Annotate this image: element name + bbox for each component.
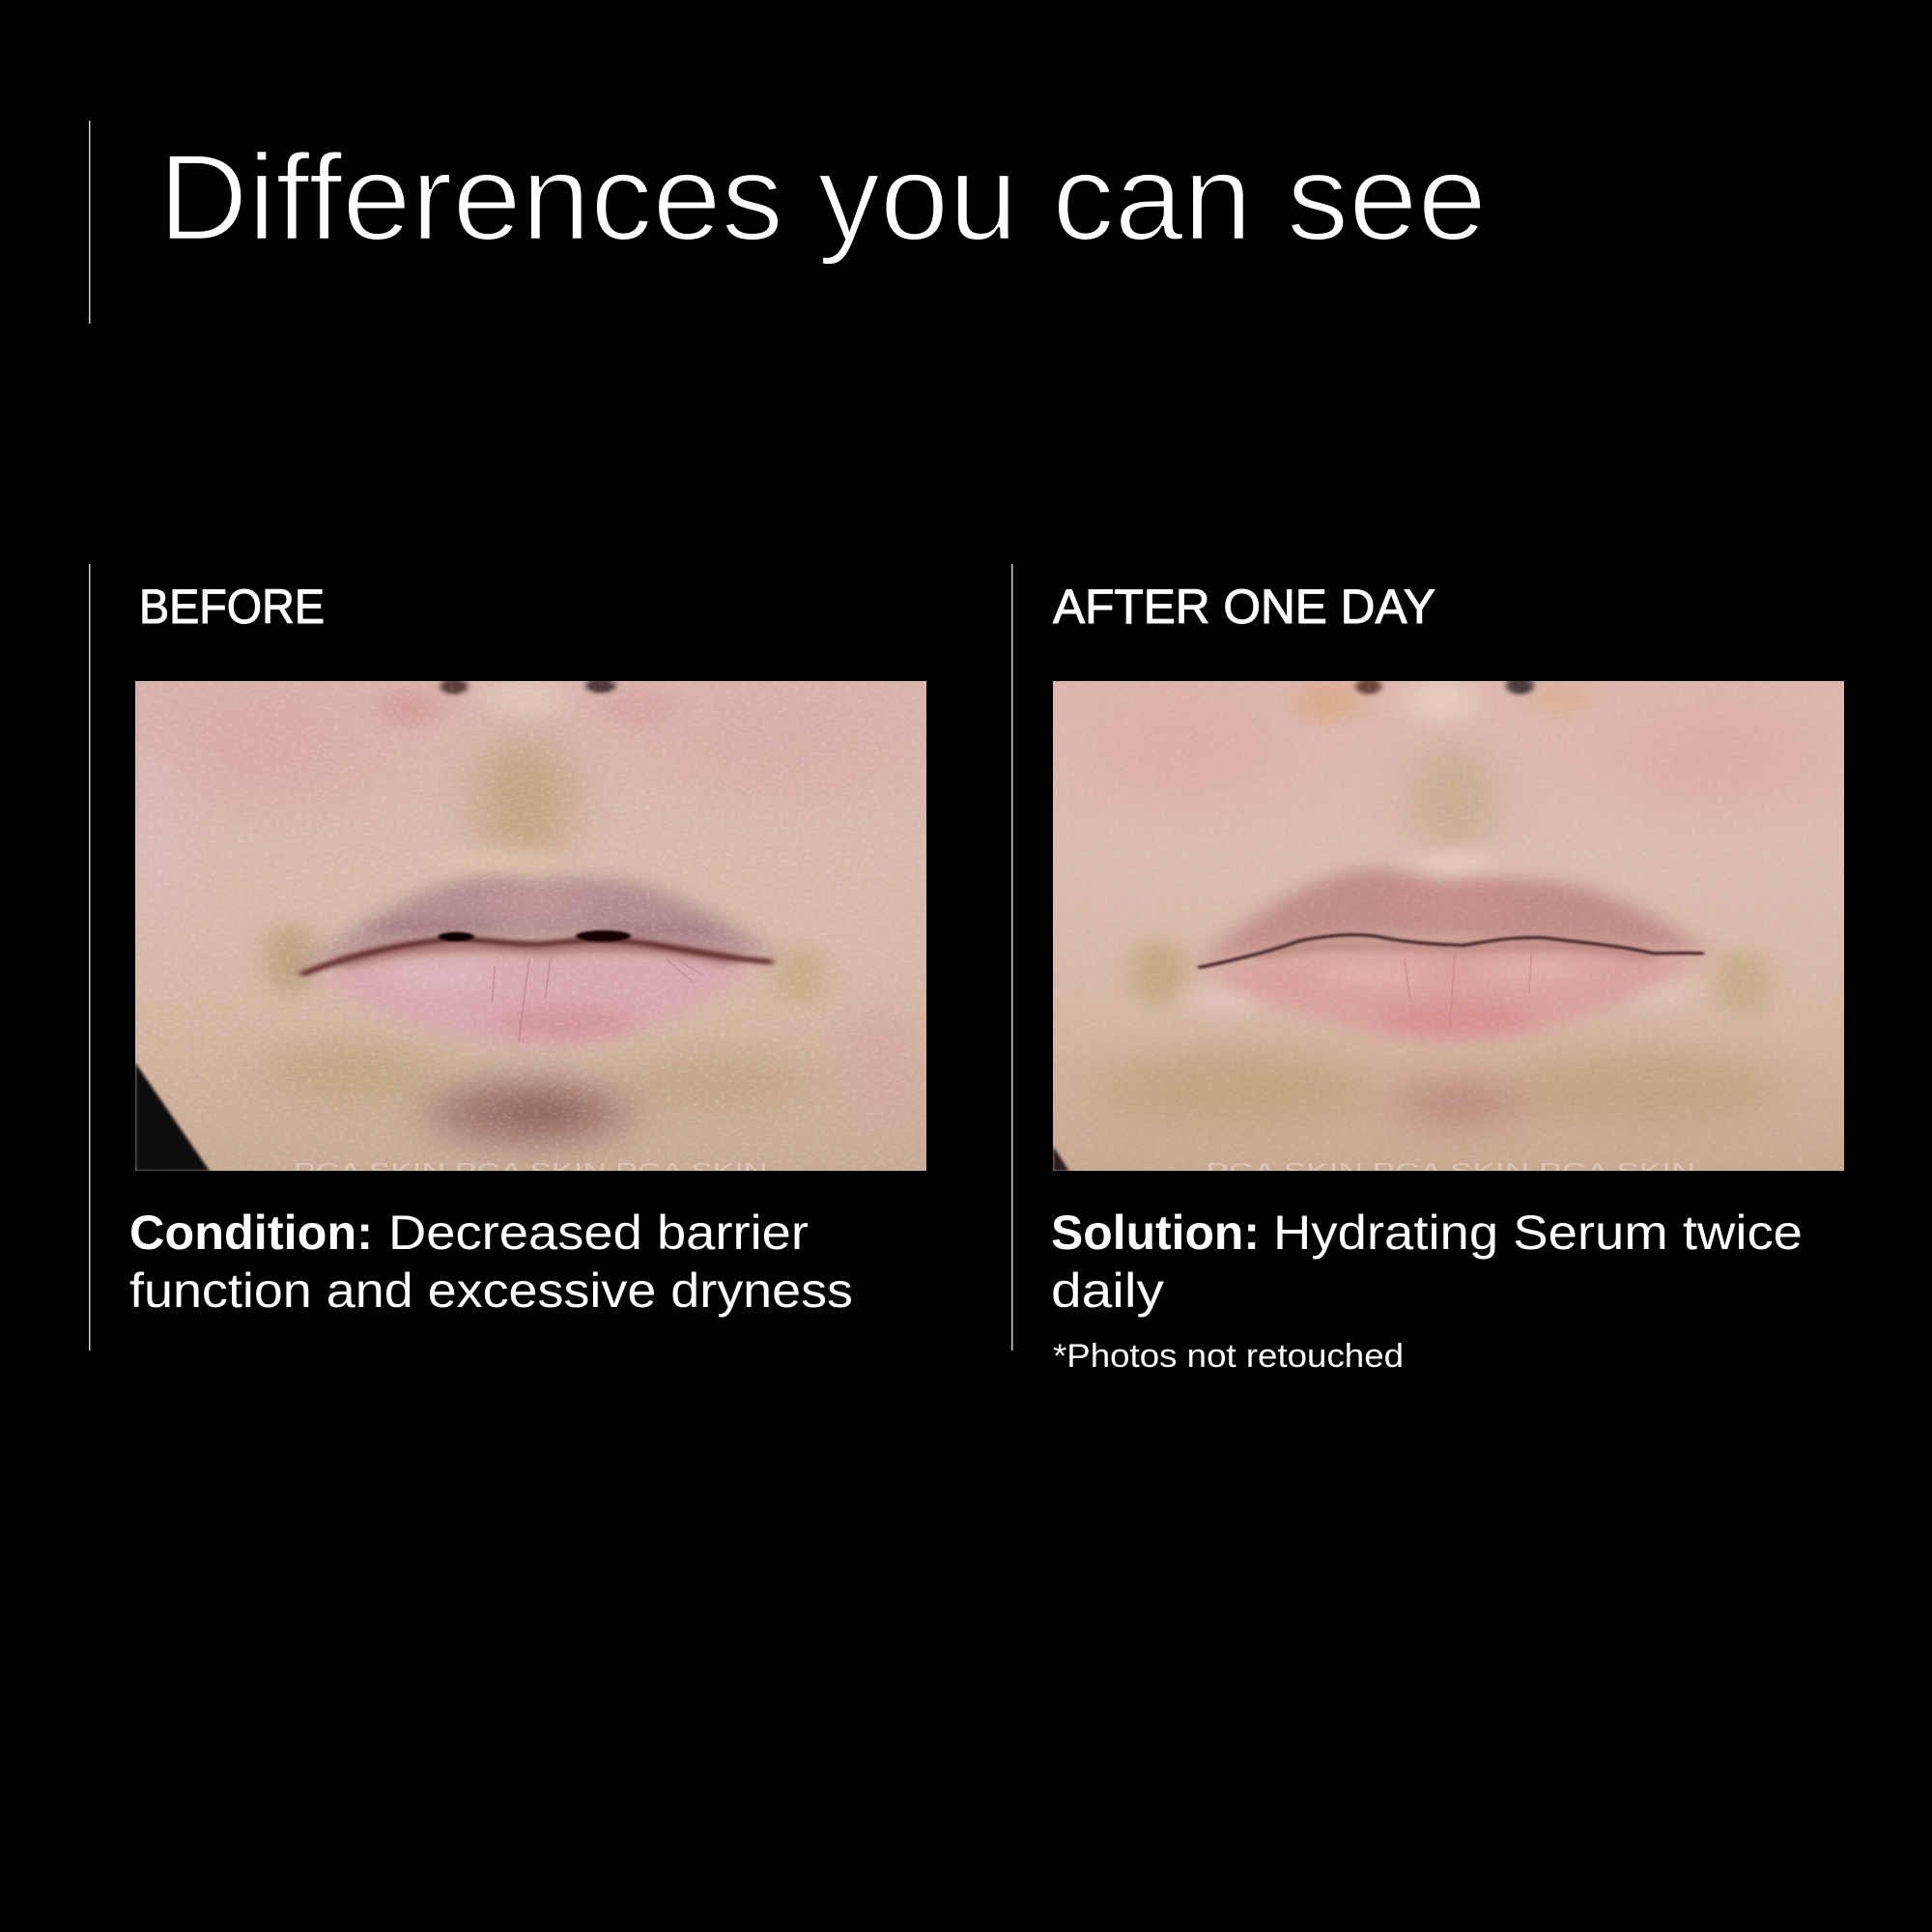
heading: after one day: AFTER ONE DAY [1053,580,1435,634]
photo: lips after: PCA SKIN PCA SKIN PCA SKIN [1206,1159,1696,1183]
panel: after one day [1011,564,1844,1375]
text: condition: Decreased barrier [388,1206,809,1260]
text: condition: function and excessive dryness [129,1264,853,1318]
panel rule: after [1011,564,1012,1350]
text: solution: Hydrating Serum twice [1273,1206,1803,1260]
mouth line [301,939,773,975]
text: solution [1051,1206,1803,1318]
text: solution: Solution: [1051,1206,1260,1260]
heading: before: BEFORE [139,580,325,634]
photo: lips before: PCA SKIN PCA SKIN PCA SKIN [294,1159,768,1183]
text: condition [129,1206,853,1318]
photo: lips before [135,681,926,1183]
text: solution: daily [1051,1264,1164,1318]
panel: before [89,564,926,1350]
panel rule: before [89,564,91,1350]
footnote: *Photos not retouched [1053,1338,1404,1375]
title rule [89,121,91,324]
title: Differences you can see [158,128,1487,266]
text: condition: Condition: [129,1206,373,1260]
mouth line [1198,935,1704,968]
photo: lips after [1053,681,1844,1183]
